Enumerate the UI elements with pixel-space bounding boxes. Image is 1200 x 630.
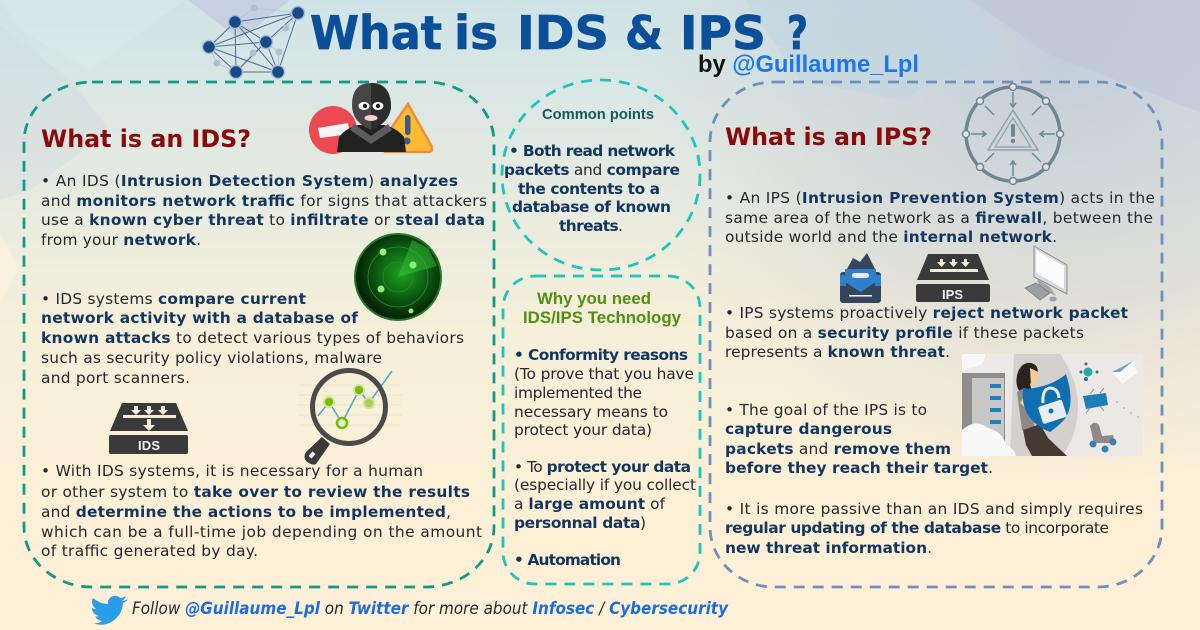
title: is <box>454 6 498 60</box>
text: IDS comparison: such as security policy violations, malware <box>41 349 382 367</box>
text: IDS human review: of traffic generated by day. <box>41 542 258 560</box>
heading: why you need: Why you need <box>537 290 651 308</box>
text: common points: threats. <box>559 217 623 235</box>
text: IPS goal: capture dangerous <box>725 420 892 438</box>
text: IPS passive: regular updating of the database to incorporate <box>725 519 1109 537</box>
text: IPS definition: outside world and the internal network. <box>725 228 1057 246</box>
text: follow line: Follow @Guillaume_Lpl on Twitter for more about Infosec / Cybersecurity <box>132 599 729 619</box>
illustration: person with shield <box>962 354 1143 456</box>
heading: common points: Common points <box>542 106 654 123</box>
text: IDS definition: and monitors network traffic for signs that attackers <box>41 192 487 210</box>
text: IPS goal: • The goal of the IPS is to <box>725 401 927 419</box>
text: IDS comparison: and port scanners. <box>41 369 190 387</box>
title: ? <box>787 6 808 60</box>
text: common points: • Both read network <box>509 142 676 160</box>
title: IDS <box>517 6 609 60</box>
heading: what is an IPS: What is an IPS? <box>725 123 932 151</box>
text: conformity reasons: implemented the <box>514 384 642 402</box>
text: common points <box>504 142 680 235</box>
text: IDS comparison <box>41 290 464 387</box>
text: conformity reasons: • Conformity reasons <box>514 346 688 364</box>
text: IDS definition <box>41 172 487 249</box>
text: protect your data: a large amount of <box>514 495 666 513</box>
text: IDS human review <box>41 462 482 560</box>
icon: warning radar circle <box>962 84 1064 184</box>
footer <box>92 596 729 625</box>
text: IPS passive <box>725 500 1143 557</box>
text: conformity reasons <box>514 346 694 439</box>
text: conformity reasons: (To prove that you have <box>514 365 694 383</box>
text: IPS rejection <box>725 304 1128 361</box>
text: IDS human review: or other system to take over to review the results <box>41 483 470 501</box>
panel: what is an IDS <box>24 82 494 587</box>
icon: masked attacker with warnings <box>309 83 432 154</box>
text: IPS definition: • An IPS (Intrusion Prevention System) acts in the <box>725 189 1155 207</box>
icon: IPS appliance <box>916 254 990 302</box>
text: IPS rejection: • IPS systems proactively reject network packet <box>725 304 1128 322</box>
text: IPS rejection: represents a known threat. <box>725 343 950 361</box>
text: IPS definition <box>725 189 1155 246</box>
title: IPS <box>680 6 766 60</box>
text: conformity reasons: necessary means to <box>514 403 668 421</box>
text: automation: • Automation <box>514 551 621 569</box>
byline: by @Guillaume_Lpl <box>698 51 919 78</box>
icon: computer <box>1025 246 1067 302</box>
heading: why you need <box>523 290 682 327</box>
text: IPS rejection: based on a security profile if these packets <box>725 324 1084 342</box>
heading: what is an IDS: What is an IDS? <box>41 125 251 153</box>
text: IDS comparison: • IDS systems compare current <box>41 290 306 308</box>
text: IDS comparison: network activity with a database of <box>41 309 358 327</box>
icon: IDS appliance: IDS <box>138 438 160 453</box>
text: IDS human review: which can be a full-time job depending on the amount <box>41 523 482 541</box>
text: common points: database of known <box>512 198 671 216</box>
icon: radar <box>355 234 441 320</box>
text: protect your data: personnal data) <box>514 514 646 532</box>
title: & <box>625 6 663 60</box>
text: protect your data <box>514 458 696 532</box>
text: IPS passive: new threat information. <box>725 539 932 557</box>
text: IDS definition: • An IDS (Intrusion Detection System) analyzes <box>41 172 458 190</box>
icon: magnifier with chart <box>298 370 402 465</box>
text: IDS human review: • With IDS systems, it is necessary for a human <box>41 462 423 480</box>
text: protect your data: (especially if you collect <box>514 476 696 494</box>
panel: common points <box>502 80 700 270</box>
icon: twitter bird <box>92 596 128 625</box>
icon: spy <box>840 253 881 303</box>
text: IPS definition: same area of the network as a firewall, between the <box>725 209 1153 227</box>
title <box>310 6 808 60</box>
text: IPS passive: • It is more passive than an IDS and simply requires <box>725 500 1143 518</box>
text: IPS goal: packets and remove them <box>725 440 951 458</box>
text: protect your data: • To protect your data <box>514 458 691 476</box>
text: IDS definition: from your network. <box>41 231 201 249</box>
text: conformity reasons: protect your data) <box>514 421 652 439</box>
text: common points: the contents to a <box>518 180 660 198</box>
heading: why you need: IDS/IPS Technology <box>523 309 682 327</box>
icon: IPS appliance: IPS <box>942 287 963 302</box>
panel: why you need IDS/IPS <box>503 276 700 584</box>
text: IPS goal: before they reach their target. <box>725 459 993 477</box>
icon: network graph <box>202 4 304 78</box>
text: common points: packets and compare <box>504 161 680 179</box>
text: IDS comparison: known attacks to detect various types of behaviors <box>41 329 464 347</box>
icon: IDS appliance <box>109 403 188 454</box>
text: IDS definition: use a known cyber threat to infiltrate or steal data <box>41 211 485 229</box>
panel: what is an IPS <box>710 82 1162 587</box>
text: IDS human review: and determine the actions to be implemented, <box>41 503 451 521</box>
title: What <box>310 6 442 60</box>
text: IPS goal <box>725 401 993 477</box>
